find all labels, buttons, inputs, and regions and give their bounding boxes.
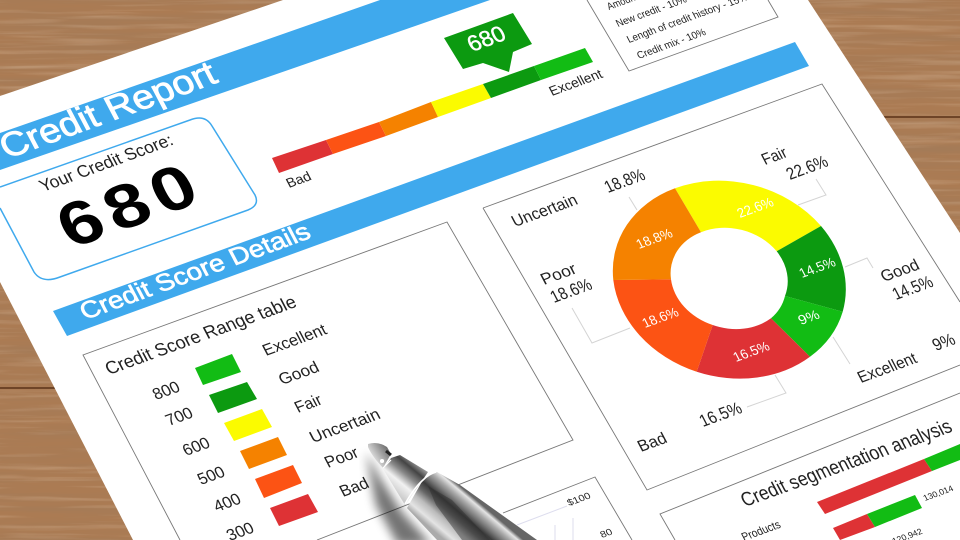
panel: credit score range table: Bad xyxy=(336,474,372,500)
credit score card: Your Credit Score: xyxy=(36,130,176,195)
panel: credit score range table: Good xyxy=(275,358,322,388)
panel: donut chart: 16.5% xyxy=(730,338,773,365)
panel: credit score range table: 700 xyxy=(162,404,196,429)
panel: donut chart: Excellent xyxy=(854,349,920,386)
pen xyxy=(366,443,537,540)
panel: donut chart: Fair xyxy=(758,143,791,168)
panel: donut chart: 16.5% xyxy=(696,399,745,430)
panel: credit score range table xyxy=(83,222,573,540)
score gauge bar: Bad xyxy=(283,168,314,191)
panel: credit score range table: Fair xyxy=(291,391,325,416)
panel: donut chart: Good xyxy=(877,256,922,285)
panel: credit score range table: Poor xyxy=(321,443,362,471)
score marker tag xyxy=(444,13,532,72)
panel: credit score range table: 600 xyxy=(179,434,213,459)
panel: donut chart: Uncertain xyxy=(508,191,581,230)
panel: donut chart: 14.5% xyxy=(796,254,839,281)
panel: donut chart: 9% xyxy=(795,306,823,328)
panel: credit segmentation analysis xyxy=(660,393,960,540)
credit score card: 680 xyxy=(44,150,209,261)
panel: credit segmentation analysis: 130,014 xyxy=(921,483,955,503)
panel: bottom line chart: $100 xyxy=(565,491,594,509)
panel: credit score range table: 800 xyxy=(149,378,183,403)
score marker tag: 680 xyxy=(463,21,510,56)
panel: donut chart: 22.6% xyxy=(734,194,777,221)
section band: credit score details: Credit Score Details xyxy=(75,218,315,325)
panel: credit score range table: Credit Score Range table xyxy=(102,292,300,379)
panel: credit score range table: 500 xyxy=(194,463,228,488)
panel: donut chart: 18.6% xyxy=(547,275,595,306)
panel: bottom line chart xyxy=(503,477,632,540)
panel: credit score range table: Excellent xyxy=(259,320,330,359)
panel: donut chart xyxy=(483,84,960,490)
panel: donut chart: 18.8% xyxy=(601,165,648,196)
panel: donut chart: Poor xyxy=(537,260,580,288)
score factors box xyxy=(587,0,778,71)
score gauge bar xyxy=(272,48,605,191)
score gauge bar: Excellent xyxy=(546,66,605,99)
panel: donut chart: 22.6% xyxy=(783,152,831,183)
panel: credit score range table: Uncertain xyxy=(306,405,383,446)
panel: donut chart: 14.5% xyxy=(889,272,936,303)
panel: donut chart: 18.8% xyxy=(633,225,676,252)
score factors box: Credit mix - 10% xyxy=(635,26,708,62)
panel: donut chart: 18.6% xyxy=(639,304,682,331)
credit score card xyxy=(0,118,256,280)
panel: donut chart: Bad xyxy=(634,429,670,455)
header band: credit report xyxy=(0,0,490,170)
panel: credit score range table: 400 xyxy=(210,490,244,515)
